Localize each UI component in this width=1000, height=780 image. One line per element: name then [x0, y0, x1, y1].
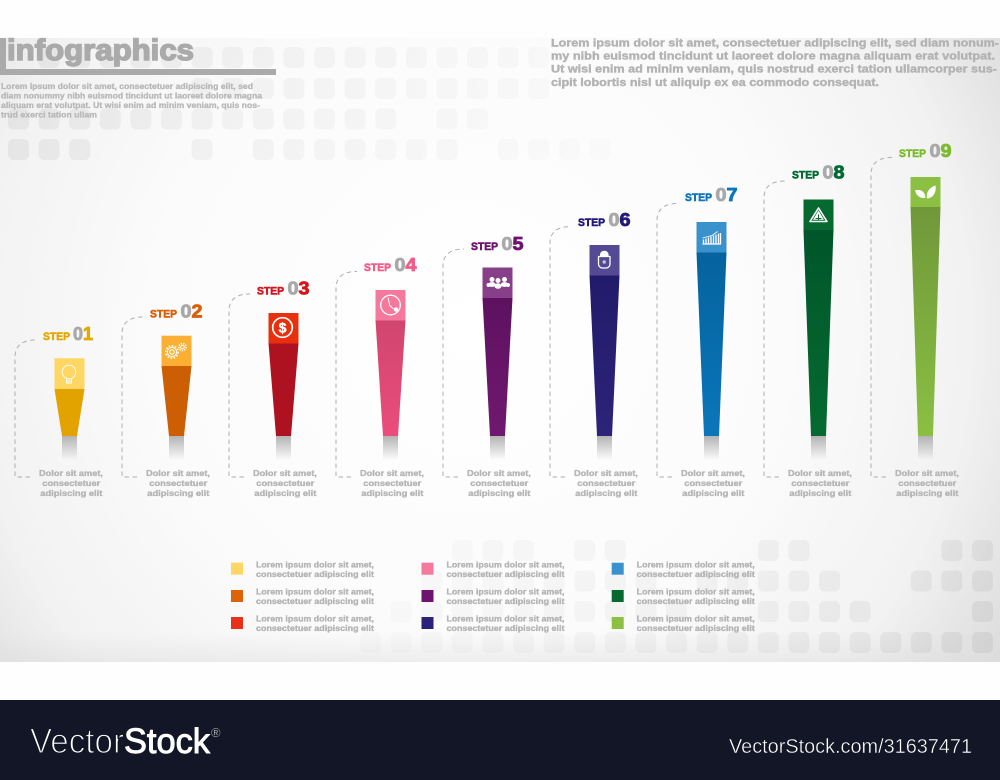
dashed connector — [15, 340, 36, 477]
footer logo: Vector — [30, 722, 124, 761]
legend item 3 — [231, 614, 374, 633]
caption: Dolor sit amet, — [146, 468, 210, 478]
caption: adipiscing elit — [896, 488, 958, 498]
caption: Dolor sit amet, — [467, 468, 531, 478]
step label — [471, 233, 524, 254]
bar shadow — [169, 436, 184, 460]
intro paragraph right: Ut wisi enim ad minim veniam, quis nostrud exerci tation ullamcorper sus- — [551, 64, 997, 76]
legend item 1: consectetuer adipiscing elit — [256, 569, 374, 579]
intro paragraph right: cipit lobortis nisl ut aliquip ex ea commodo consequat. — [551, 77, 879, 89]
step label: 01 — [73, 323, 93, 344]
footer image id: VectorStock.com/31637471 — [729, 736, 972, 758]
caption: consectetuer — [363, 478, 422, 488]
step 04 — [336, 254, 424, 498]
caption: consectetuer — [684, 478, 743, 488]
icon tile — [482, 268, 512, 298]
legend item 3: Lorem ipsum dolor sit amet, — [256, 614, 374, 624]
step label: 04 — [394, 254, 417, 275]
step 07 — [657, 184, 745, 498]
caption: Dolor sit amet, — [574, 468, 638, 478]
step 08 — [764, 162, 852, 498]
caption — [146, 468, 210, 498]
legend item 4 — [422, 560, 565, 579]
caption: adipiscing elit — [789, 488, 851, 498]
caption: Dolor sit amet, — [788, 468, 852, 478]
title: infographics — [7, 34, 194, 67]
caption — [360, 468, 424, 498]
intro paragraph right: Lorem ipsum dolor sit amet, consectetuer adipiscing elit, sed diam nonum- — [551, 38, 999, 50]
icon: dollar coin — [273, 318, 292, 337]
caption: consectetuer — [898, 478, 957, 488]
step label: 05 — [502, 233, 524, 254]
dashed connector — [550, 226, 571, 477]
legend item 7: Lorem ipsum dolor sit amet, — [637, 560, 755, 570]
bar — [482, 298, 512, 436]
bar — [376, 320, 406, 436]
dashed connector — [122, 317, 143, 477]
icon tile — [162, 336, 192, 366]
legend item 3: consectetuer adipiscing elit — [256, 623, 374, 633]
step label: STEP — [792, 170, 819, 182]
legend item 1 — [231, 560, 374, 579]
step label — [43, 323, 93, 344]
footer logo: Stock — [124, 722, 210, 761]
bar shadow — [276, 436, 291, 460]
legend item 6: Lorem ipsum dolor sit amet, — [446, 614, 564, 624]
icon tile — [268, 313, 298, 344]
step label — [685, 184, 738, 205]
step 06 — [550, 209, 638, 498]
caption: adipiscing elit — [361, 488, 423, 498]
caption — [574, 468, 638, 498]
legend item 7 — [612, 560, 755, 579]
caption: Dolor sit amet, — [253, 468, 317, 478]
legend item 7: consectetuer adipiscing elit — [637, 569, 755, 579]
legend item 2: consectetuer adipiscing elit — [256, 596, 374, 606]
caption: adipiscing elit — [575, 488, 637, 498]
bar shadow — [383, 436, 398, 460]
caption: Dolor sit amet, — [360, 468, 424, 478]
icon: dollar coin: $ — [279, 320, 287, 336]
legend item 4: Lorem ipsum dolor sit amet, — [446, 560, 564, 570]
icon: leaves — [915, 186, 936, 198]
caption — [788, 468, 852, 498]
bar shadow — [490, 436, 505, 460]
step 09 — [871, 140, 959, 498]
step label: STEP — [43, 331, 70, 343]
caption: adipiscing elit — [682, 488, 744, 498]
legend item 8 — [612, 586, 755, 606]
step label: 02 — [180, 300, 202, 322]
caption — [467, 468, 531, 498]
icon tile — [696, 222, 726, 252]
caption: consectetuer — [470, 478, 529, 488]
dashed connector — [657, 204, 678, 477]
step label: 03 — [288, 278, 310, 298]
intro paragraph left — [1, 81, 262, 120]
icon tile — [804, 200, 834, 230]
bar shadow — [918, 436, 933, 460]
caption: consectetuer — [256, 478, 315, 488]
caption: adipiscing elit — [254, 488, 316, 498]
caption: consectetuer — [149, 478, 208, 488]
caption: Dolor sit amet, — [39, 468, 103, 478]
step label: 07 — [716, 184, 738, 205]
bar shadow — [597, 436, 612, 460]
gradient backdrop panel — [0, 38, 1000, 662]
caption — [39, 468, 103, 498]
step label: STEP — [685, 192, 712, 204]
legend item 1: Lorem ipsum dolor sit amet, — [256, 560, 374, 570]
bottom rounded-square pattern — [360, 540, 993, 653]
caption — [895, 468, 959, 498]
caption: adipiscing elit — [147, 488, 209, 498]
bar shadow — [62, 436, 77, 460]
bar shadow — [811, 436, 826, 460]
step label: STEP — [899, 148, 926, 160]
bar — [910, 207, 940, 436]
legend item 2: Lorem ipsum dolor sit amet, — [256, 586, 374, 596]
step 05 — [443, 233, 531, 498]
step label — [257, 278, 310, 298]
caption: adipiscing elit — [468, 488, 530, 498]
intro paragraph left: aliquam erat volutpat. Ut wisi enim ad minim veniam, quis nos- — [1, 100, 260, 110]
dashed connector — [229, 294, 250, 477]
bar — [804, 230, 834, 436]
step label: STEP — [150, 308, 177, 320]
caption: consectetuer — [42, 478, 101, 488]
icon: light bulb — [62, 365, 76, 383]
legend item 6 — [422, 614, 565, 633]
icon: group of people — [486, 277, 510, 289]
legend item 5: consectetuer adipiscing elit — [446, 596, 565, 606]
bar shadow — [704, 436, 719, 460]
intro paragraph left: Lorem ipsum dolor sit amet, consectetuer adipiscing elit, sed — [1, 81, 253, 91]
legend item 2 — [231, 586, 374, 606]
bar — [162, 366, 192, 436]
step label: 06 — [608, 209, 630, 230]
step label: STEP — [471, 241, 498, 253]
icon tile — [590, 245, 620, 276]
step label — [150, 300, 202, 322]
intro paragraph left: diam nonummy nibh euismod tincidunt ut laoreet dolore magna — [1, 90, 262, 100]
step label: 08 — [822, 162, 844, 182]
icon: gears — [166, 343, 186, 358]
caption: consectetuer — [577, 478, 636, 488]
icon tile — [376, 290, 406, 320]
step label — [578, 209, 630, 230]
legend item 6: consectetuer adipiscing elit — [446, 623, 565, 633]
caption — [253, 468, 317, 498]
dashed connector — [764, 181, 785, 477]
caption: consectetuer — [791, 478, 850, 488]
bar — [590, 276, 620, 436]
title underline bracket — [0, 38, 276, 75]
legend item 9: consectetuer adipiscing elit — [637, 623, 755, 633]
footer logo — [30, 722, 221, 761]
intro paragraph right: my nibh euismod tincidunt ut laoreet dolore magna aliquam erat volutpat. — [551, 50, 995, 62]
title block — [0, 34, 276, 75]
legend — [231, 560, 755, 633]
step label: 09 — [930, 140, 952, 161]
icon: clock — [381, 295, 400, 315]
legend item 4: consectetuer adipiscing elit — [446, 569, 565, 579]
intro paragraph right — [551, 38, 999, 89]
legend item 5 — [422, 586, 565, 606]
step 02 — [122, 300, 210, 498]
icon tile — [54, 358, 84, 389]
step label — [364, 254, 417, 275]
bar — [54, 389, 84, 436]
caption: adipiscing elit — [40, 488, 102, 498]
dashed connector — [871, 158, 892, 477]
step 01 — [15, 323, 103, 498]
caption: Dolor sit amet, — [681, 468, 745, 478]
step label — [792, 162, 844, 182]
icon: recycle triangle — [810, 208, 827, 222]
dashed connector — [336, 272, 357, 477]
step 03 — [229, 278, 317, 498]
intro paragraph left: trud exerci tation ullam — [1, 110, 97, 120]
step label: STEP — [257, 286, 284, 298]
bar — [696, 252, 726, 436]
step label — [899, 140, 952, 161]
footer logo: ® — [211, 725, 221, 740]
legend item 9: Lorem ipsum dolor sit amet, — [637, 614, 755, 624]
dashed connector — [443, 249, 464, 477]
legend item 8: consectetuer adipiscing elit — [637, 596, 755, 606]
icon: padlock — [598, 251, 610, 268]
icon: rising bar chart — [702, 232, 721, 244]
top rounded-square pattern — [8, 47, 610, 160]
legend item 9 — [612, 614, 755, 633]
legend item 8: Lorem ipsum dolor sit amet, — [637, 586, 755, 596]
bar — [268, 344, 298, 436]
caption: Dolor sit amet, — [895, 468, 959, 478]
icon tile — [910, 177, 940, 207]
caption — [681, 468, 745, 498]
legend item 5: Lorem ipsum dolor sit amet, — [446, 586, 564, 596]
footer band — [0, 700, 1000, 780]
step label: STEP — [364, 262, 391, 274]
step label: STEP — [578, 217, 605, 229]
